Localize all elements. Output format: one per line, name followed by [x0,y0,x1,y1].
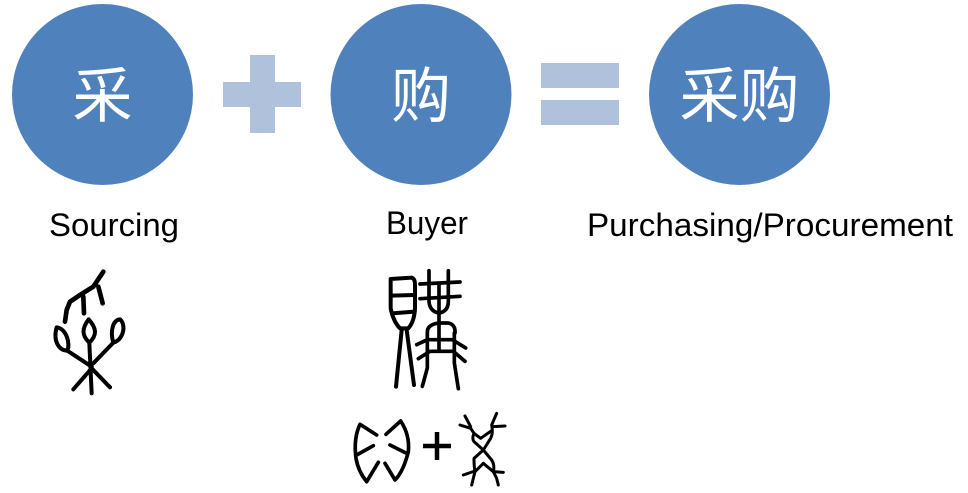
circle: 采: 采 [72,63,132,130]
equals sign [541,63,619,125]
label: Sourcing: Sourcing [49,207,179,243]
right part: 冓 [417,271,466,389]
circle: 采购: 采购 [680,63,800,130]
circle: 购: 购 [391,63,451,130]
icon: seal script 采 [55,272,123,393]
plus between seal glyphs [423,432,451,460]
icon: seal script 贝 [355,421,409,482]
left part: 貝 [391,278,415,387]
label: Buyer: Buyer [386,205,468,241]
circle: 采购 [649,4,830,185]
icon: seal script 冓 lower form [460,413,505,485]
plus sign [223,55,301,133]
icon: seal script 購 [391,271,466,389]
label: Purchasing/Procurement: Purchasing/Procurement [587,207,953,243]
circle: 购 [330,4,512,185]
circle: 采 [12,4,193,185]
